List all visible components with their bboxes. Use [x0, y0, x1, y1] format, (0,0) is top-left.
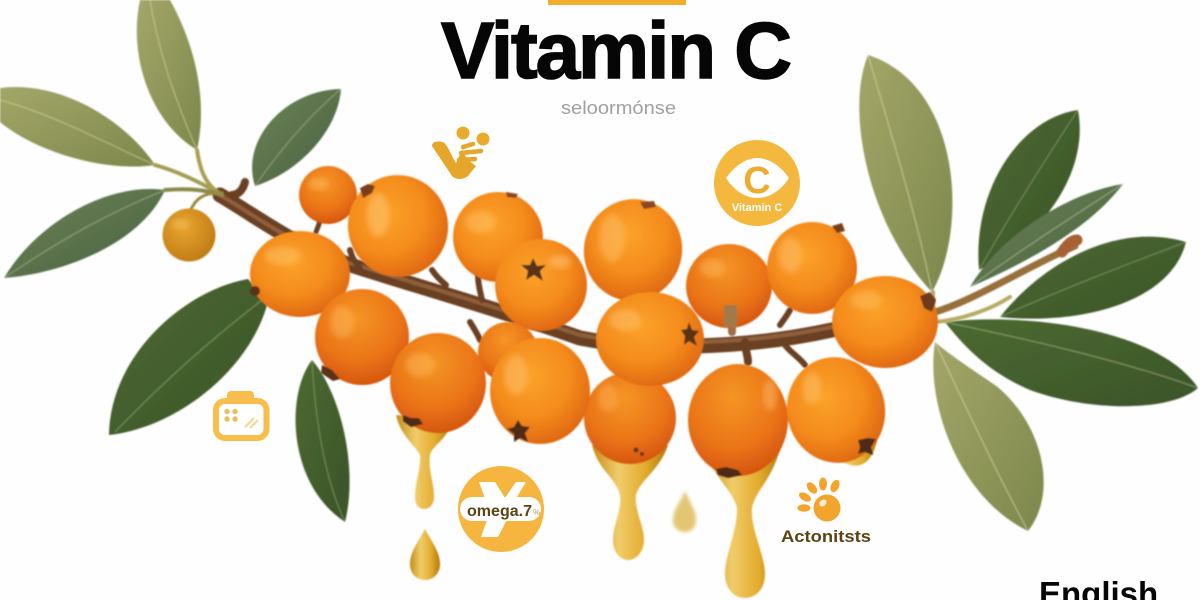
- leaf: small grey-green: [252, 89, 341, 186]
- icon: Vitamin C eye badge: Vitamin C: [732, 202, 782, 214]
- leaf: upper left: [0, 87, 155, 167]
- leaf: narrow light right: [970, 184, 1123, 287]
- berry: top 5: [572, 188, 694, 312]
- top accent bar: [548, 0, 686, 5]
- icon: checkmark V with dots: [432, 126, 490, 179]
- drip: centre: [592, 445, 668, 560]
- berry: top far left: [250, 231, 350, 317]
- icon: Vitamin C eye badge: [714, 140, 800, 226]
- berry: hanging centre: [584, 372, 676, 464]
- drip: left: [396, 415, 452, 509]
- berry: small top back: [299, 166, 357, 224]
- berry: top right: [767, 222, 857, 314]
- leaf: left long: [4, 189, 165, 278]
- berry: hanging right: [688, 364, 788, 478]
- left leaves: [0, 0, 350, 522]
- leaf: lower dark right: [945, 319, 1198, 406]
- leaf: mid dark right: [1000, 237, 1186, 319]
- berries: [162, 164, 938, 478]
- berry: lower right: [777, 348, 895, 472]
- icon: omega-7 badge: [458, 466, 544, 552]
- leaf: lower olive right: [933, 342, 1044, 531]
- icon: omega-7 badge: omega.7: [467, 503, 532, 520]
- leaf: top upright: [137, 0, 201, 150]
- berry: centre front: [596, 292, 704, 386]
- leaf: dark upright right: [978, 110, 1080, 270]
- berry: lower centre left: [490, 338, 590, 444]
- berry: top centre with calyx: [495, 239, 587, 331]
- title: Vitamin C: [441, 6, 792, 95]
- oil drops: [396, 415, 877, 598]
- icon: case with dots: [216, 391, 266, 438]
- drop: free left: [410, 529, 440, 580]
- branch and stems: [155, 150, 1077, 365]
- drop: blurred: [673, 491, 696, 532]
- subtitle: seloormónse: [561, 98, 676, 118]
- drip: right: [705, 440, 782, 598]
- berry: back centre right: [686, 244, 772, 328]
- icon: Vitamin C eye badge: C: [743, 160, 771, 202]
- berry: lower left: [390, 333, 486, 433]
- leaf: lower big dark: [109, 279, 267, 435]
- leaf: lower hanging: [296, 360, 350, 522]
- berry: far right: [832, 276, 938, 368]
- drip: small on right berry: [830, 440, 877, 466]
- berry: top 3: [453, 192, 543, 282]
- berry: yellow small left: [162, 208, 216, 262]
- berry: hidden back: [478, 322, 538, 382]
- berry: mid left: [315, 289, 409, 385]
- icon: sun/paw with label: Actonitsts: [781, 527, 871, 546]
- berry: top 2: [337, 164, 459, 288]
- icon: omega-7 badge: %: [533, 508, 540, 517]
- leaf: large olive top right: [859, 55, 952, 292]
- right leaves: [859, 55, 1198, 531]
- icon: sun/paw with label: [781, 478, 871, 546]
